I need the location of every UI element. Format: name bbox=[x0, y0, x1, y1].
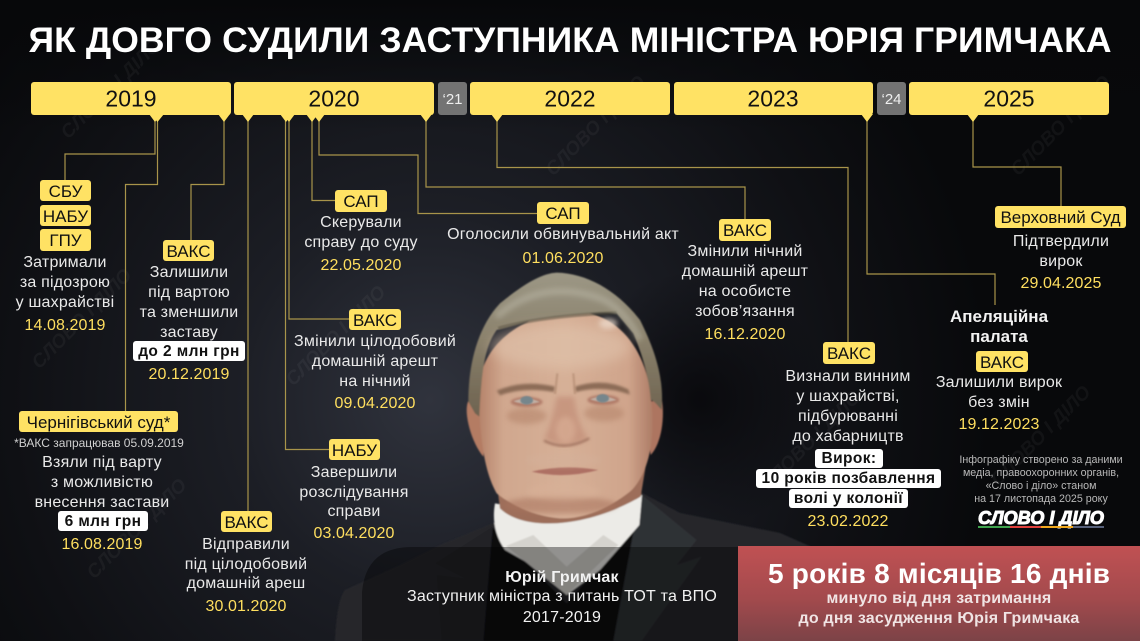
badge: Чернігівський суд* bbox=[27, 413, 171, 432]
panel: duration summary bbox=[738, 546, 1140, 641]
event: 19.12.2023 bbox=[936, 307, 1063, 433]
duration note: до дня засудження Юрія Гримчака bbox=[798, 610, 1080, 627]
description: з можливістю bbox=[51, 474, 153, 491]
description: Підтвердили bbox=[1013, 233, 1109, 250]
year 2022: 2022 bbox=[544, 86, 596, 112]
description: Скерували bbox=[320, 214, 402, 231]
event: 03.04.2020 bbox=[299, 439, 409, 542]
year 2022 bbox=[470, 82, 670, 122]
year 2025: 2025 bbox=[983, 86, 1035, 112]
event: 16.08.2019 bbox=[14, 411, 184, 553]
date: 16.12.2020 bbox=[704, 326, 786, 343]
description: Залишили bbox=[150, 264, 228, 281]
description: справу до суду bbox=[304, 234, 418, 251]
verdict: волі у колонії bbox=[794, 490, 903, 507]
badge: ВАКС bbox=[353, 311, 397, 330]
badge: НАБУ bbox=[332, 441, 377, 460]
date: 19.12.2023 bbox=[958, 416, 1040, 433]
description: під вартою bbox=[148, 284, 230, 301]
badge: ВАКС bbox=[224, 513, 269, 532]
event: 20.12.2019 bbox=[133, 240, 245, 383]
date: 01.06.2020 bbox=[522, 250, 604, 267]
portrait caption: Юрій Гримчак bbox=[505, 569, 620, 586]
date: 22.05.2020 bbox=[320, 257, 402, 274]
year 2024 bbox=[877, 82, 906, 115]
date: 29.04.2025 bbox=[1020, 275, 1102, 292]
badges: СБУ bbox=[49, 182, 83, 201]
source note: Інфографіку створено за даними bbox=[959, 454, 1123, 466]
description: на нічний bbox=[339, 373, 411, 390]
watermarks: СЛОВО І ДІЛО bbox=[1007, 72, 1115, 180]
year 2023 bbox=[674, 82, 873, 122]
event: 01.06.2020 bbox=[447, 202, 679, 267]
date: 09.04.2020 bbox=[334, 395, 416, 412]
description: вирок bbox=[1039, 253, 1083, 270]
date: 14.08.2019 bbox=[24, 317, 106, 334]
description: розслідування bbox=[299, 484, 409, 501]
portrait caption: 2017-2019 bbox=[523, 609, 601, 626]
description: внесення застави bbox=[35, 494, 169, 511]
amount: 6 млн грн bbox=[65, 513, 141, 530]
description: зобов’язання bbox=[695, 303, 795, 320]
connector lines bbox=[65, 115, 1061, 511]
dark caption band bbox=[362, 547, 738, 641]
badge: САП bbox=[343, 192, 379, 211]
year 2021 bbox=[438, 82, 467, 115]
description: та зменшили bbox=[140, 304, 238, 321]
source note: медіа, правоохоронних органів, bbox=[963, 467, 1119, 479]
description: Визнали винним bbox=[785, 368, 911, 385]
description: Змінили нічний bbox=[688, 243, 802, 260]
watermarks: СЛОВО І ДІЛО bbox=[28, 265, 136, 373]
description: домашній арешт bbox=[312, 353, 439, 370]
description: Затримали bbox=[23, 254, 107, 271]
description: без змін bbox=[968, 394, 1030, 411]
event: 29.04.2025 bbox=[995, 206, 1126, 292]
description: домашній ареш bbox=[187, 575, 305, 592]
date: 03.04.2020 bbox=[313, 525, 395, 542]
description: Оголосили обвинувальний акт bbox=[447, 226, 679, 243]
description: Залишили вирок bbox=[936, 374, 1063, 391]
year 2025 bbox=[909, 82, 1109, 122]
source note: «Слово і діло» станом bbox=[986, 480, 1096, 492]
event: 23.02.2022 bbox=[756, 342, 941, 530]
date: 30.01.2020 bbox=[205, 598, 287, 615]
verdict: Вирок: bbox=[822, 450, 876, 467]
verdict: 10 років позбавлення bbox=[762, 470, 935, 487]
source note: на 17 листопада 2025 року bbox=[974, 493, 1108, 505]
badge: ВАКС bbox=[166, 242, 211, 261]
badge: ВАКС bbox=[827, 344, 871, 363]
description: під цілодобовий bbox=[185, 556, 307, 573]
description: у шахрайстві, bbox=[796, 388, 900, 405]
year 2019 bbox=[31, 82, 231, 122]
logo: Слово і діло: СЛОВО І ДІЛО bbox=[978, 508, 1104, 528]
verdict bbox=[756, 449, 941, 508]
badge: ВАКС bbox=[723, 221, 767, 240]
year 2020 bbox=[234, 82, 434, 122]
portrait caption: Заступник міністра з питань ТОТ та ВПО bbox=[407, 588, 717, 605]
watermarks: СЛОВО І ДІЛО bbox=[757, 387, 865, 495]
watermarks: СЛОВО І ДІЛО bbox=[987, 382, 1095, 490]
timeline years bbox=[31, 82, 1109, 122]
watermarks: СЛОВО І ДІЛО bbox=[57, 35, 165, 143]
year 2019: 2019 bbox=[105, 86, 157, 112]
badge bbox=[537, 202, 589, 224]
watermarks: СЛОВО І ДІЛО bbox=[542, 72, 650, 180]
description: домашній арешт bbox=[682, 263, 809, 280]
year 2023: 2023 bbox=[747, 86, 799, 112]
watermarks: СЛОВО І ДІЛО bbox=[83, 475, 191, 583]
court name: Апеляційна bbox=[950, 307, 1049, 326]
description: у шахрайстві bbox=[16, 294, 114, 311]
amount: до 2 млн грн bbox=[138, 343, 240, 360]
portrait: Yurii Hrymchak bbox=[335, 273, 833, 641]
footnote: *ВАКС запрацював 05.09.2019 bbox=[14, 436, 184, 450]
event: 16.12.2020 bbox=[682, 219, 809, 343]
event: 09.04.2020 bbox=[294, 309, 456, 412]
badges bbox=[40, 180, 91, 251]
badge: ВАКС bbox=[980, 353, 1024, 372]
description: за підозрою bbox=[20, 274, 110, 291]
watermarks: СЛОВО І ДІЛО bbox=[282, 282, 390, 390]
description: Взяли під варту bbox=[42, 454, 162, 471]
title: ЯК ДОВГО СУДИЛИ ЗАСТУПНИКА МІНІСТРА ЮРІЯ ГРИМЧАКА bbox=[28, 20, 1112, 60]
description: Змінили цілодобовий bbox=[294, 333, 456, 350]
description: Відправили bbox=[202, 536, 290, 553]
description: підбурюванні bbox=[798, 408, 898, 425]
description: на особисте bbox=[699, 283, 791, 300]
date: 23.02.2022 bbox=[807, 513, 889, 530]
event: 22.05.2020 bbox=[304, 190, 418, 274]
year 2021: ‘21 bbox=[442, 91, 463, 108]
date: 20.12.2019 bbox=[148, 366, 230, 383]
duration: 5 років 8 місяців 16 днів bbox=[768, 558, 1110, 589]
description: заставу bbox=[160, 324, 218, 341]
badge: Верховний Суд bbox=[1000, 208, 1121, 227]
year 2024: ‘24 bbox=[881, 91, 902, 108]
description: Завершили bbox=[311, 464, 397, 481]
date: 16.08.2019 bbox=[61, 536, 143, 553]
duration note: минуло від дня затримання bbox=[827, 590, 1051, 607]
event: 14.08.2019 bbox=[16, 180, 114, 334]
badge: САП bbox=[545, 204, 581, 223]
badges: НАБУ bbox=[43, 207, 88, 226]
description: до хабарництв bbox=[792, 428, 904, 445]
court name: палата bbox=[970, 327, 1028, 346]
event: 30.01.2020 bbox=[185, 511, 307, 615]
year 2020: 2020 bbox=[308, 86, 360, 112]
badges: ГПУ bbox=[49, 231, 82, 250]
description: справи bbox=[327, 503, 381, 520]
